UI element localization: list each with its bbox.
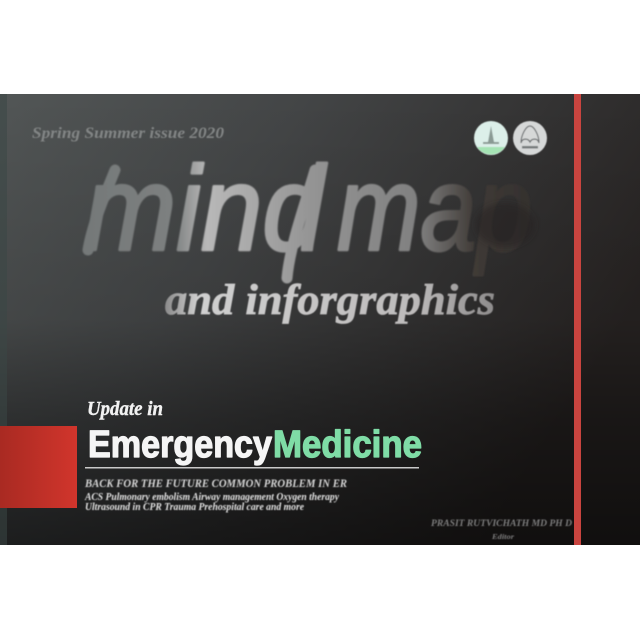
- cover background: [0, 94, 640, 545]
- heading: emergency medicine: [88, 424, 422, 466]
- editor credit: PRASIT RUTVICHATH MD PH D: [431, 519, 572, 529]
- heading: emergency medicine: Emergency: [88, 424, 272, 466]
- title brush flourishes: [88, 170, 315, 278]
- issue label: Spring Summer issue 2020: [32, 125, 224, 142]
- title: mind map: map: [337, 142, 532, 276]
- red vertical stripe: [574, 94, 581, 545]
- logo: green seal: [474, 121, 508, 155]
- editor credit: [431, 519, 572, 541]
- divider line: [85, 467, 419, 468]
- title: mind map: mind: [84, 142, 327, 276]
- subtitle: and inforgraphics: [165, 277, 495, 324]
- tagline: BACK FOR THE FUTURE COMMON PROBLEM IN ER: [84, 478, 347, 490]
- title: mind map: [84, 142, 532, 278]
- red square: [0, 426, 77, 508]
- editor credit: Editor: [491, 532, 514, 541]
- smudge on title: [475, 203, 535, 247]
- topics list: ACS Pulmonary embolism Airway management Oxygen therapy: [84, 492, 339, 503]
- heading: update in: Update in: [87, 398, 163, 420]
- topics list: Ultrasound in CPR Trauma Prehospital care and more: [85, 502, 304, 513]
- heading: emergency medicine: Medicine: [273, 424, 422, 466]
- logo: grey arches: [513, 121, 547, 155]
- topics list: [84, 492, 339, 513]
